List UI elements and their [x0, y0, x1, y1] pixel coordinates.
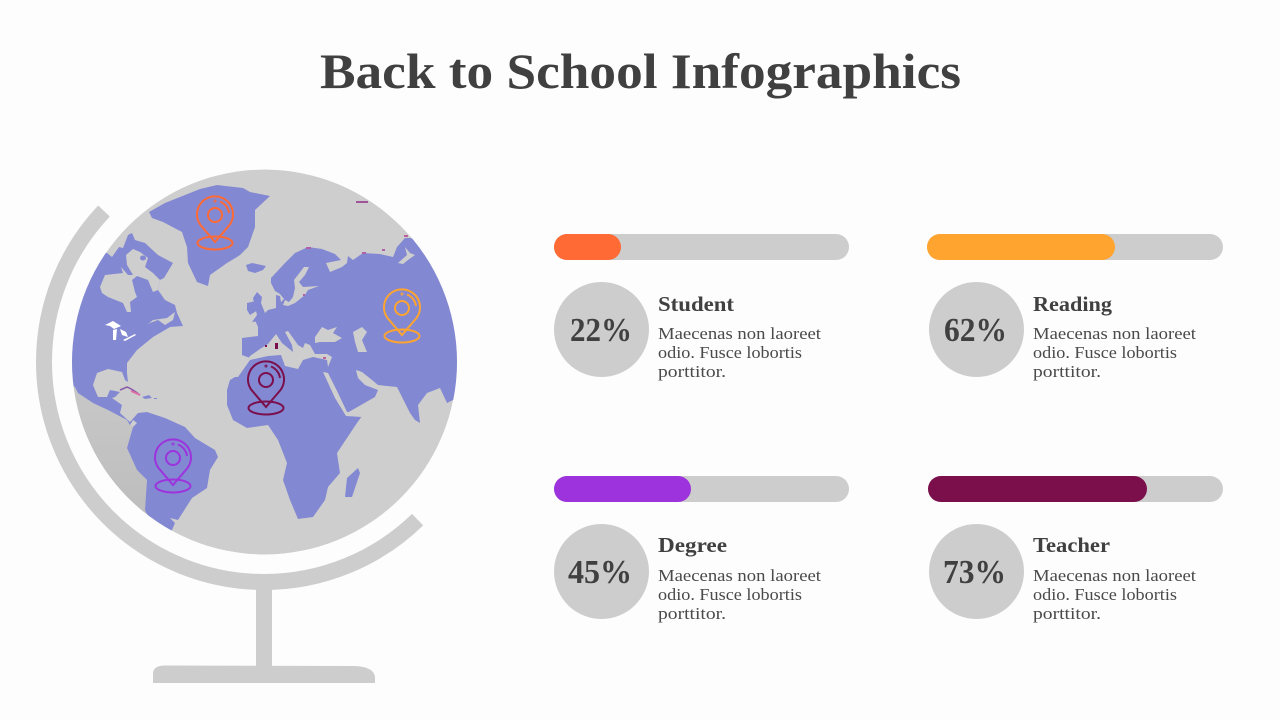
Eurasia and Africa	[227, 238, 480, 519]
stat circle: 73%: 73%	[943, 554, 1006, 591]
text block: reading description: odio. Fusce lobortis	[1033, 343, 1177, 362]
heading: Reading: Reading	[1033, 292, 1113, 316]
text block: teacher description: porttitor.	[1033, 604, 1101, 623]
panel: reading	[927, 234, 1223, 381]
text block: reading description: Maecenas non laoreet	[1033, 324, 1196, 343]
text block: teacher description: odio. Fusce lobortis	[1033, 585, 1177, 604]
panel: student	[554, 234, 849, 381]
heading: Teacher: Teacher	[1033, 533, 1110, 557]
text block: teacher description	[1033, 566, 1196, 623]
globe stem	[256, 588, 272, 668]
progress bar: degree 45%	[554, 476, 849, 502]
stat circle: 22%: 22%	[570, 312, 632, 349]
stat circle: 62%: 62%	[944, 312, 1007, 349]
stat circle: 73%	[929, 524, 1024, 619]
globe stand arc	[44, 211, 418, 582]
text block: student description: odio. Fusce lobortis	[658, 343, 802, 362]
Baltic sea	[283, 267, 319, 306]
text block: reading description	[1033, 324, 1196, 381]
icon: purple location pin	[155, 439, 191, 492]
panel: degree	[554, 476, 849, 623]
progress bar: reading 62%	[927, 234, 1223, 260]
Mediterranean sea	[235, 331, 332, 377]
text block: degree description: odio. Fusce lobortis	[658, 585, 802, 604]
text block: degree description: porttitor.	[658, 604, 726, 623]
Black sea	[315, 327, 342, 343]
title: Back to School Infographics	[320, 43, 961, 99]
Hudson Bay	[100, 249, 160, 312]
text block: student description: Maecenas non laoreet	[658, 324, 821, 343]
Greenland	[149, 185, 270, 286]
globe base	[153, 666, 375, 683]
text block: degree description	[658, 566, 821, 623]
heading: Student: Student	[658, 292, 734, 316]
icon: amber location pin	[384, 289, 420, 342]
icon: maroon location pin	[248, 361, 284, 414]
Red sea	[323, 372, 362, 417]
stat circle: 22%	[554, 282, 649, 377]
stat circle: 62%	[929, 282, 1024, 377]
stat circle: 45%: 45%	[568, 554, 632, 591]
Great Lakes	[105, 321, 136, 341]
progress bar: student 22%	[554, 234, 849, 260]
panel: teacher	[928, 476, 1223, 623]
icon: orange location pin	[197, 196, 233, 250]
text block: student description: porttitor.	[658, 362, 726, 381]
stat circle: 45%	[554, 524, 649, 619]
text block: reading description: porttitor.	[1033, 362, 1101, 381]
heading: Degree: Degree	[658, 533, 727, 557]
map specks	[120, 201, 408, 395]
Americas	[72, 233, 218, 530]
globe illustration	[40, 170, 480, 683]
text block: student description	[658, 324, 821, 381]
Caspian sea	[353, 327, 367, 352]
text block: teacher description: Maecenas non laoreet	[1033, 566, 1196, 585]
text block: degree description: Maecenas non laoreet	[658, 566, 821, 585]
world map sphere	[72, 170, 457, 554]
progress bar: teacher 73%	[928, 476, 1223, 502]
islands	[142, 263, 360, 497]
